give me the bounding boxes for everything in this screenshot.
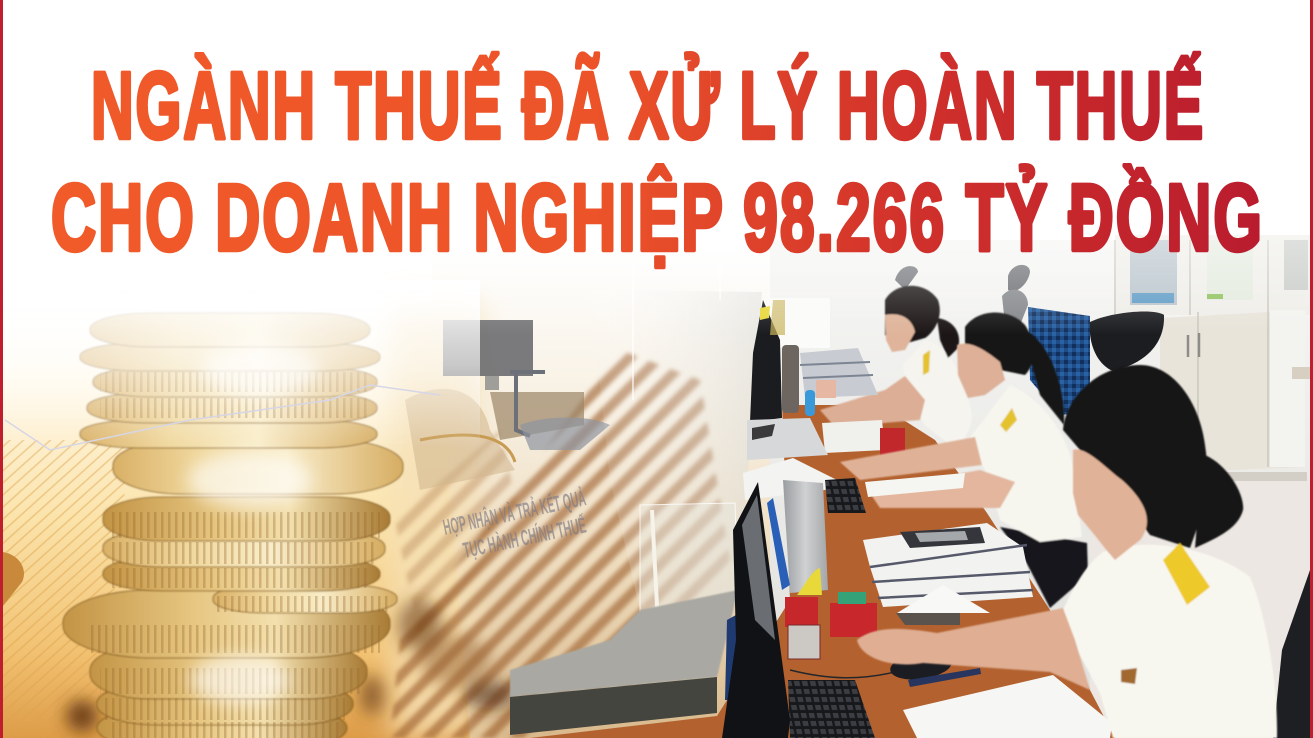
gold coin stack xyxy=(3,313,403,738)
granite counter xyxy=(510,590,738,697)
officer in back xyxy=(820,286,972,447)
officer in front xyxy=(857,365,1277,738)
mouse and pen xyxy=(790,649,981,687)
officer in middle xyxy=(840,312,1088,608)
fine gridded chart texture xyxy=(3,440,130,738)
side coin xyxy=(3,552,24,606)
desk paper in front xyxy=(903,675,1112,738)
dark shadows under stripes xyxy=(66,599,516,732)
stack of documents with calculator xyxy=(863,523,1033,625)
faded back-office monitor and chairs xyxy=(405,320,610,490)
office wall and floor xyxy=(760,240,1313,738)
white fade over upper coins xyxy=(0,280,480,450)
faded sign text xyxy=(441,485,588,563)
glass counter panel xyxy=(590,260,762,625)
white fade behind title xyxy=(0,0,1313,335)
infographic canvas: TỤC HÀNH CHÍNH THUẾ xyxy=(461,512,588,563)
right red edge xyxy=(1310,0,1313,738)
left golden background xyxy=(0,300,520,738)
upper keyboard xyxy=(825,478,866,513)
title xyxy=(51,53,1264,271)
desk stationery xyxy=(760,300,877,659)
glowing chart digits xyxy=(188,344,318,704)
dark counter partition xyxy=(750,300,782,422)
line chart xyxy=(5,385,440,450)
top desk paper xyxy=(865,473,965,497)
chairs xyxy=(895,265,1310,738)
coin rim ridges xyxy=(90,372,390,738)
broad diagonal stripes xyxy=(390,350,730,738)
blend between gold and cream areas xyxy=(390,300,480,738)
documents near the back desk xyxy=(800,348,905,458)
front monitor xyxy=(722,482,790,738)
storage cabinets xyxy=(1115,235,1313,481)
middle cream background xyxy=(430,250,770,738)
water bottle xyxy=(782,345,799,413)
lower keyboard xyxy=(788,680,875,738)
infographic canvas: HỢP NHẬN VÀ TRẢ KẾT QUẢ xyxy=(441,485,588,540)
wooden desk xyxy=(530,405,1115,738)
tray and loose papers xyxy=(743,418,837,500)
left red edge xyxy=(0,0,3,738)
grey box file xyxy=(783,480,828,593)
blue binder xyxy=(767,498,790,590)
counter front edge xyxy=(510,677,717,735)
blue cloth under front monitor xyxy=(725,610,748,700)
